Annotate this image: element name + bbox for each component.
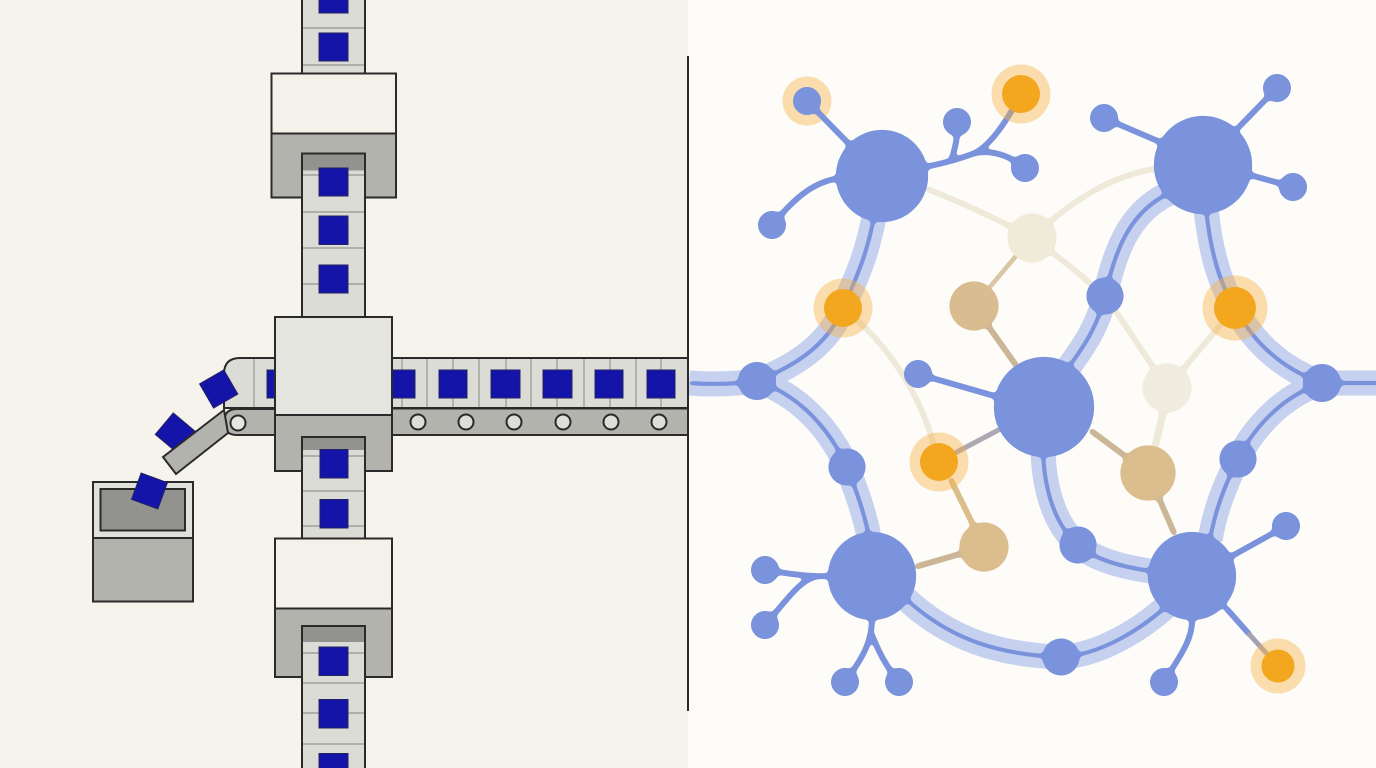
tan link toward beige node	[974, 256, 1016, 306]
top vertical conveyor	[302, 0, 365, 74]
hub nodes	[828, 116, 1252, 620]
panel background: network side	[688, 0, 1376, 768]
top machine	[272, 74, 396, 198]
panel: organic network	[689, 64, 1376, 696]
faint beige links and nodes	[843, 168, 1235, 473]
leaf nodes	[752, 74, 1306, 696]
panel background: assembly line side	[0, 0, 688, 768]
upper vertical conveyor	[302, 154, 365, 318]
grey link to orange node	[938, 426, 1006, 462]
left conveyor end	[224, 358, 276, 435]
central machine	[275, 317, 392, 471]
core lines of highway links	[689, 192, 1376, 657]
bottom vertical conveyor	[302, 626, 365, 768]
grey stem to lower-right orange node	[1248, 633, 1268, 655]
horizontal conveyor	[392, 358, 688, 435]
branch links	[765, 88, 1293, 682]
lower vertical conveyor	[302, 437, 365, 539]
tan links and nodes	[915, 282, 1175, 571]
junction nodes	[738, 278, 1340, 675]
falling parts	[155, 370, 238, 452]
blue network: hubs, junctions, branches	[689, 74, 1376, 696]
thick highway links	[689, 192, 1376, 657]
orange highlighted nodes	[814, 64, 1306, 694]
bottom machine	[275, 538, 392, 677]
central divider	[687, 56, 689, 711]
panel: assembly line	[93, 0, 688, 768]
halo behind blue node	[782, 76, 832, 126]
collection bin	[93, 473, 193, 602]
chute	[163, 410, 228, 474]
